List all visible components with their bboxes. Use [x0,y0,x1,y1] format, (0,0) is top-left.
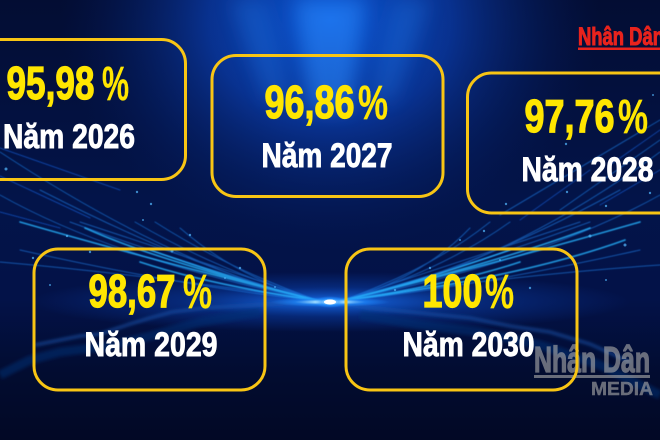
value 97,76%: 97,76 [524,90,614,142]
card: 2027 [212,56,443,196]
card: 2026 [0,40,186,180]
card: 2029 [34,249,265,390]
label Năm 2030: Năm 2030 [402,326,534,364]
watermark: Nhân Dân Media: MEDIA [591,379,653,399]
cloud ridge glow [0,302,660,395]
label Năm 2027: Năm 2027 [262,137,392,175]
star particles [4,94,654,291]
light rays: right fan [340,120,660,301]
value 96,86%: 96,86 [264,76,354,128]
card: 2030 [346,249,577,390]
value 95,98%: % [102,58,129,111]
value 97,76%: % [618,91,648,144]
card: 2028 [468,73,660,213]
value 98,67%: % [183,266,212,319]
light rays: left fan [0,148,320,301]
value 100%: 100 [422,265,482,317]
value 96,86%: % [358,77,388,130]
value 98,67%: 98,67 [88,265,176,317]
label Năm 2029: Năm 2029 [84,326,218,364]
watermark: Nhân Dân Media [534,339,653,399]
value 95,98%: 95,98 [6,57,94,109]
central flare [270,296,390,308]
label Năm 2026: Năm 2026 [3,118,135,156]
value 100%: % [485,266,514,319]
